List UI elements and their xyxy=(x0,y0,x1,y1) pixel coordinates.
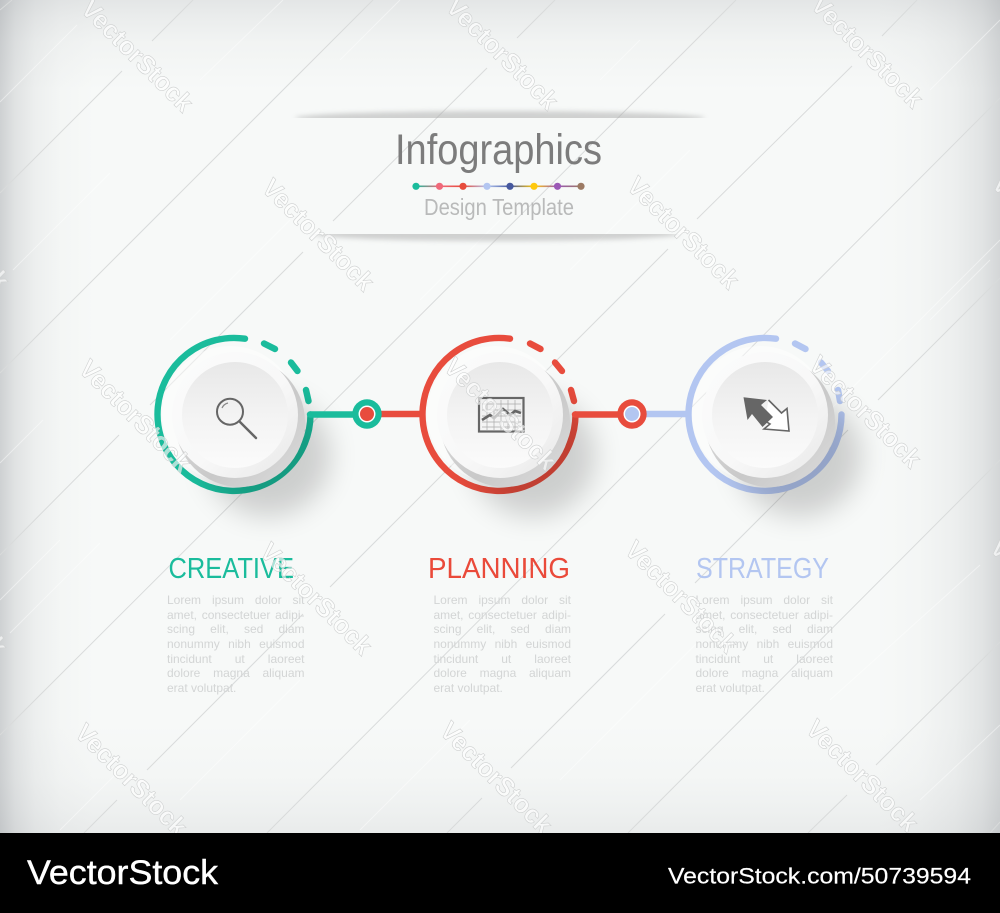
text block: strategy: Lorem ipsum dolor sit xyxy=(696,593,833,607)
text block: strategy: amet, consectetuer adipi- xyxy=(696,608,833,622)
footer logo: VectorStock xyxy=(27,854,219,892)
watermarks: VectorStock xyxy=(619,534,744,659)
coloured dot line xyxy=(412,183,585,190)
watermarks: VectorStock xyxy=(800,713,925,838)
button 2 xyxy=(427,346,570,487)
ring 2 xyxy=(423,338,576,491)
text block: planning xyxy=(434,593,571,695)
watermarks: VectorStock xyxy=(621,170,746,295)
watermarks: VectorStock xyxy=(803,349,928,474)
text block: strategy: scing elit, sed diam xyxy=(696,622,833,636)
ring 3 xyxy=(689,338,842,491)
step 3: strategy circle xyxy=(689,338,861,516)
heading: planning: PLANNING xyxy=(428,553,570,585)
watermarks: VectorStock xyxy=(256,172,381,297)
subtitle: Design Template xyxy=(424,194,574,220)
title panel top shadow xyxy=(296,109,704,118)
text block: creative: erat volutpat. xyxy=(167,681,236,695)
watermarks: VectorStock xyxy=(438,351,563,476)
text block: planning: erat volutpat. xyxy=(434,681,503,695)
text block: creative: scing elit, sed diam xyxy=(167,622,304,636)
connector 1 xyxy=(310,399,424,429)
text block: creative: Lorem ipsum dolor sit xyxy=(167,593,304,607)
text block: strategy: tincidunt ut laoreet xyxy=(696,652,833,666)
heading: strategy: STRATEGY xyxy=(696,553,829,585)
watermarks: VectorStock xyxy=(254,536,379,661)
soft shadow 1 xyxy=(206,396,330,516)
watermarks: VectorStock xyxy=(73,353,198,478)
text block: creative: tincidunt ut laoreet xyxy=(167,652,304,666)
text block: strategy xyxy=(696,593,833,695)
text block: creative: nonummy nibh euismod xyxy=(167,637,304,651)
footer url: VectorStock.com/50739594 xyxy=(668,864,971,888)
text block: strategy: nonummy nibh euismod xyxy=(696,637,833,651)
button 3 xyxy=(692,346,835,487)
text block: planning: scing elit, sed diam xyxy=(434,622,571,636)
footer bar xyxy=(0,833,1000,913)
connector 2 xyxy=(575,399,689,429)
step 2: planning circle xyxy=(423,338,595,516)
text block: creative xyxy=(167,593,304,695)
title: Infographics xyxy=(395,126,602,174)
text block: planning: dolore magna aliquam xyxy=(434,666,571,680)
ring 1 xyxy=(158,338,310,491)
panel: title xyxy=(295,111,705,241)
step 1: creative circle xyxy=(158,338,330,516)
icon: arrows xyxy=(744,397,789,431)
button 1 xyxy=(162,346,305,487)
text block: planning: Lorem ipsum dolor sit xyxy=(434,593,571,607)
text block: creative: dolore magna aliquam xyxy=(167,666,304,680)
text block: strategy: dolore magna aliquam xyxy=(696,666,833,680)
text block: planning: nonummy nibh euismod xyxy=(434,637,571,651)
text block: planning: tincidunt ut laoreet xyxy=(434,652,571,666)
watermarks: VectorStock xyxy=(69,717,194,842)
icon: magnifier xyxy=(217,399,256,438)
text block: strategy: erat volutpat. xyxy=(696,681,765,695)
soft shadow 2 xyxy=(471,396,595,516)
soft shadow 3 xyxy=(737,396,861,516)
text block: planning: amet, consectetuer adipi- xyxy=(434,608,571,622)
watermarks: VectorStock xyxy=(434,715,559,840)
text block: creative: amet, consectetuer adipi- xyxy=(167,608,304,622)
title panel bottom shadow xyxy=(317,234,676,243)
heading: creative: CREATIVE xyxy=(168,553,294,585)
icon: chart xyxy=(479,398,524,432)
